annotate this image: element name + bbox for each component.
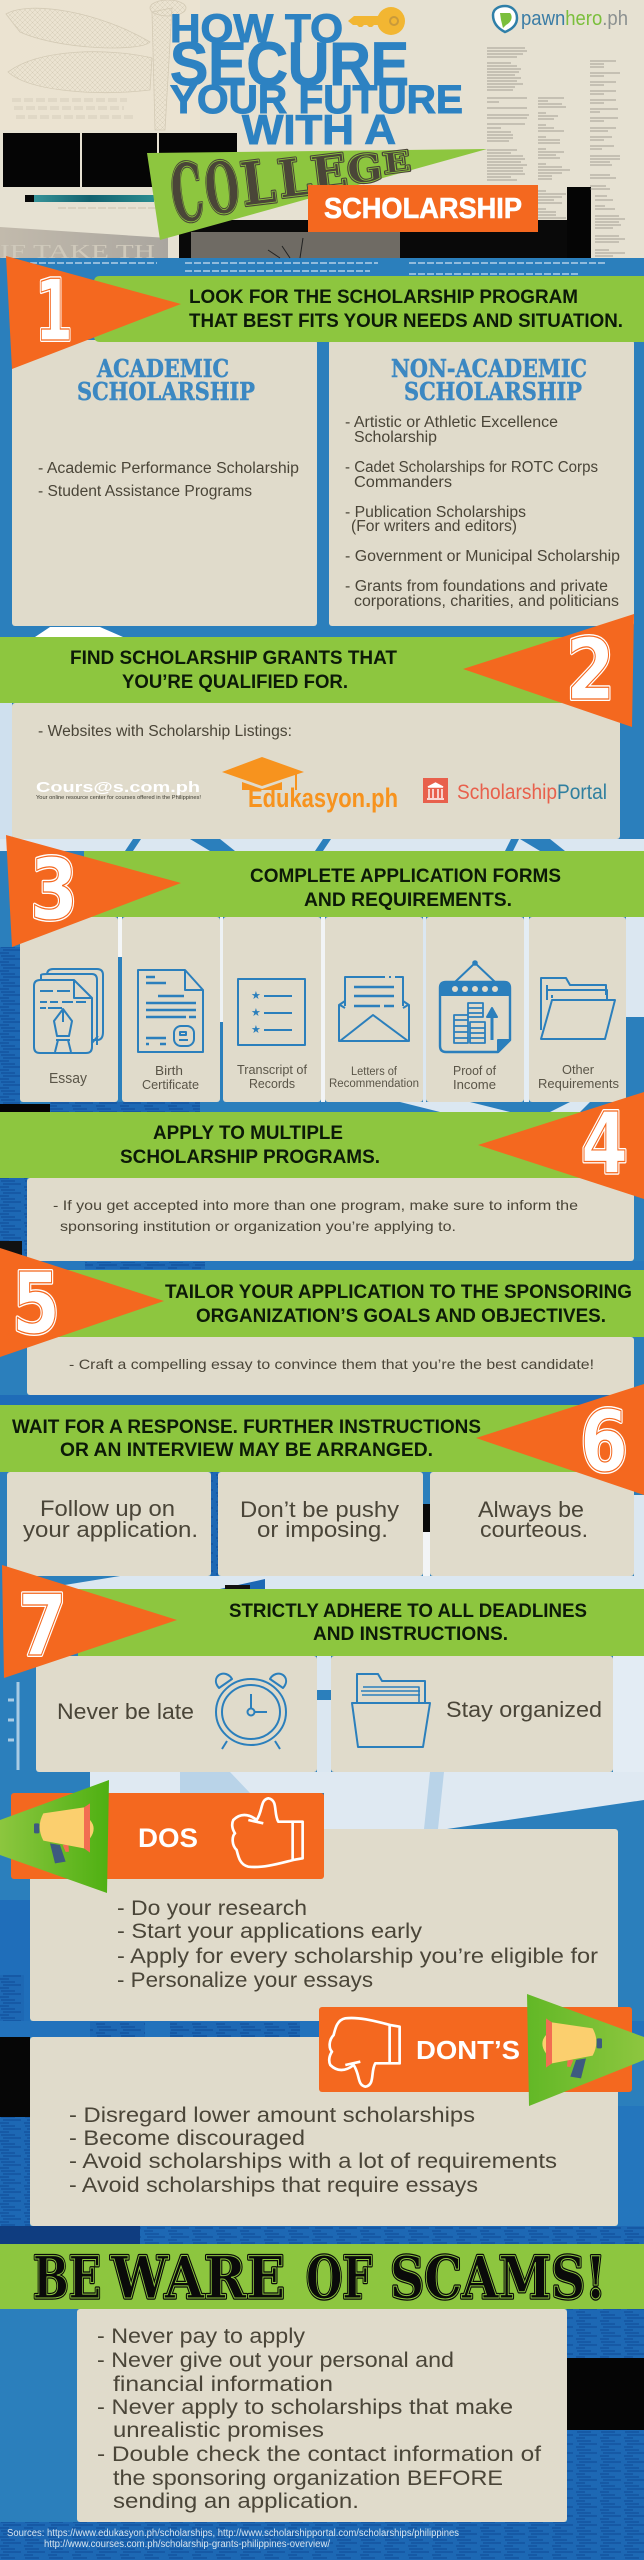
pennant: step 3: [6, 835, 181, 947]
panel: other requirements: [529, 917, 626, 1102]
sources: Sources: https://www.edukasyon.ph/scholarships, http://www.scholarshipportal.com/scholarships/philippines: [7, 2528, 459, 2539]
panel: other requirements: Other: [562, 1063, 594, 1077]
sources: http://www.courses.com.ph/scholarship-grants-philippines-overview/: [44, 2539, 330, 2550]
pennant: college: G: [344, 144, 385, 193]
panel: letters of recommendation: Recommendation: [329, 1078, 419, 1090]
panel: dos list: - Start your applications early: [117, 1920, 423, 1943]
pennant: step 6: [476, 1384, 644, 1495]
pennant: college: C: [166, 144, 209, 242]
panel: non-academic scholarship: - Artistic or Athletic Excellence: [345, 414, 558, 431]
panel: don't be pushy: [218, 1472, 423, 1576]
icon: envelope: [339, 977, 409, 1041]
pennant: college: [147, 144, 487, 242]
panel: don'ts list: - Become discouraged: [69, 2127, 305, 2150]
banner: step 7: STRICTLY ADHERE TO ALL DEADLINES: [229, 1600, 587, 1622]
panel: academic scholarship: [12, 340, 317, 626]
banner: step 5: TAILOR YOUR APPLICATION TO THE SPONSORING: [165, 1281, 632, 1303]
sources: [7, 2528, 459, 2550]
banner: step 2: FIND SCHOLARSHIP GRANTS THAT: [70, 647, 397, 669]
upside-down strip text: [30, 263, 606, 274]
banner: step 3: AND REQUIREMENTS.: [304, 889, 512, 911]
pennant: step 4: [478, 1092, 644, 1199]
pennant: college: G: [344, 144, 385, 193]
pennant: college: E: [308, 144, 350, 203]
pennant: college: E: [308, 144, 350, 203]
panel: courteous: courteous.: [480, 1517, 588, 1542]
icon: certificate: [138, 970, 203, 1052]
icon: thumbs down: [329, 2018, 400, 2087]
icon: transcript: ★: [251, 1023, 261, 1036]
panel: proof of income: Proof of: [453, 1064, 497, 1078]
pennant: step 3: 3: [30, 841, 78, 940]
pennant: college: L: [275, 146, 315, 211]
panel: step 4 text: - If you get accepted into more than one program, make sure to inform the: [53, 1197, 578, 1213]
icon: key: [348, 7, 405, 35]
banner: dos: [0, 1780, 324, 1893]
panel: don'ts list: - Disregard lower amount scholarships: [69, 2104, 475, 2127]
icon: essay: [34, 969, 103, 1053]
panel: non-academic scholarship: corporations, charities, and politicians: [354, 593, 619, 610]
panel: academic scholarship: SCHOLARSHIP: [77, 377, 255, 406]
panel: birth certificate: Certificate: [142, 1078, 199, 1092]
panel: websites: [12, 703, 620, 839]
icon: folder: [541, 978, 615, 1039]
pennant: college: L: [237, 147, 279, 221]
panel: letters of recommendation: [325, 917, 423, 1102]
panel: non-academic scholarship: NON-ACADEMIC: [391, 354, 587, 383]
icon: transcript: [238, 979, 305, 1045]
grey banner: [0, 227, 168, 263]
pennant: step 2: [463, 614, 634, 727]
panel: don't be pushy: or imposing.: [257, 1517, 388, 1542]
panel: scam warnings: the sponsoring organization BEFORE: [113, 2467, 503, 2490]
header collage background: [0, 0, 644, 263]
title: [170, 7, 463, 153]
icon: megaphone: [34, 1803, 94, 1863]
title: WITH A: [242, 106, 396, 153]
panel: stay organized: [331, 1656, 613, 1772]
panel: dos list: - Apply for every scholarship you’re eligible for: [117, 1945, 598, 1968]
panel: dos list: [30, 1829, 618, 2021]
panel: non-academic scholarship: - Grants from foundations and private: [345, 578, 608, 595]
panel: websites: - Websites with Scholarship Listings:: [38, 723, 292, 740]
panel: non-academic scholarship: (For writers and editors): [351, 518, 517, 535]
banner: beware of scams: OF: [306, 2244, 372, 2312]
banner: step 5: ORGANIZATION’S GOALS AND OBJECTIVES.: [196, 1305, 606, 1327]
panel: non-academic scholarship: [329, 340, 634, 626]
black photo blocks: [3, 133, 237, 187]
panel: scam warnings: financial information: [113, 2373, 333, 2396]
panel: step 5 text: [27, 1337, 634, 1395]
panel: step 4 text: sponsoring institution or organization you’re applying to.: [60, 1218, 456, 1234]
panel: courteous: [430, 1472, 634, 1576]
banner: beware of scams: WARE: [110, 2244, 285, 2312]
panel: letters of recommendation: Letters of: [351, 1066, 398, 1078]
logo: pawnhero.ph: pawnhero.ph: [521, 8, 628, 30]
banner: step 5: [40, 1270, 644, 1337]
pennant: college: L: [275, 146, 315, 211]
banner: beware of scams: [0, 2244, 644, 2312]
panel: non-academic scholarship: - Government or Municipal Scholarship: [345, 548, 620, 565]
panel: essay: [20, 917, 118, 1102]
title: YOUR FUTURE: [170, 78, 463, 122]
title: HOW TO: [170, 7, 343, 51]
pennant: step 1: 1: [35, 262, 73, 361]
panel: non-academic scholarship: - Publication Scholarships: [345, 504, 526, 521]
panel: proof of income: Income: [453, 1078, 496, 1092]
banner: step 4: SCHOLARSHIP PROGRAMS.: [120, 1146, 380, 1168]
panel: transcript of records: Records: [249, 1077, 295, 1091]
logo: pawnhero.ph: [493, 6, 628, 32]
grey banner: IF TAKE TH: [0, 241, 155, 263]
pennant: step 7: 7: [18, 1577, 67, 1676]
banner: step 2: YOU’RE QUALIFIED FOR.: [122, 671, 348, 693]
panel: non-academic scholarship: Scholarship: [354, 429, 437, 446]
banner: scholarship: [308, 185, 538, 232]
panel: dos list: - Do your research: [117, 1897, 307, 1920]
pennant: step 5: 5: [12, 1255, 60, 1354]
panel: never be late: [36, 1656, 317, 1772]
banner: step 6: [0, 1405, 600, 1472]
title: SECURE: [170, 30, 409, 98]
banner: step 4: APPLY TO MULTIPLE: [153, 1122, 343, 1144]
banner: step 6: OR AN INTERVIEW MAY BE ARRANGED.: [60, 1439, 433, 1461]
panel: scam warnings: [77, 2309, 567, 2522]
banner: beware of scams: WARE: [110, 2244, 285, 2312]
panel: don'ts list: - Avoid scholarships that require essays: [69, 2174, 478, 2197]
banner: step 6: WAIT FOR A RESPONSE. FURTHER INSTRUCTIONS: [12, 1416, 481, 1438]
pennant: college: E: [381, 145, 412, 181]
banner: step 1: [94, 276, 644, 342]
pennant: step 5: 5: [12, 1255, 60, 1354]
icon: megaphone: [542, 2018, 602, 2078]
pennant: step 7: 7: [18, 1577, 67, 1676]
panel: non-academic scholarship: Commanders: [354, 474, 452, 491]
panel: step 4 text: [27, 1178, 634, 1261]
panel: scam warnings: sending an application.: [113, 2490, 359, 2513]
icon: income calendar: [440, 961, 510, 1052]
banner: step 1: LOOK FOR THE SCHOLARSHIP PROGRAM: [189, 286, 578, 308]
logo: courses.com.ph: [36, 779, 201, 801]
banner: don'ts: [319, 1994, 644, 2106]
panel: don'ts list: [30, 2037, 618, 2226]
panel: transcript of records: Transcript of: [237, 1063, 308, 1077]
panel: follow up: Follow up on: [40, 1496, 175, 1521]
panel: scam warnings: unrealistic promises: [113, 2419, 324, 2442]
panel: academic scholarship: ACADEMIC: [96, 354, 229, 383]
panel: stay organized: Stay organized: [446, 1697, 602, 1722]
icon: thumbs up: [232, 1798, 303, 1867]
icon: transcript: ★: [251, 989, 261, 1002]
banner: step 7: AND INSTRUCTIONS.: [313, 1623, 508, 1645]
pennant: step 5: [0, 1248, 164, 1357]
panel: step 5 text: - Craft a compelling essay to convince them that you’re the best candidate!: [69, 1356, 594, 1372]
panel: proof of income: [426, 917, 524, 1102]
panel: don'ts list: - Avoid scholarships with a lot of requirements: [69, 2150, 557, 2173]
panel: don't be pushy: Don’t be pushy: [240, 1497, 399, 1522]
panel: dos list: - Personalize your essays: [117, 1969, 373, 1992]
pennant: step 6: 6: [580, 1393, 628, 1492]
panel: follow up: [7, 1472, 211, 1576]
panel: scam warnings: - Never give out your personal and: [97, 2349, 454, 2372]
banner: step 4: [0, 1112, 600, 1178]
banner: step 3: [84, 851, 644, 917]
pennant: step 4: 4: [581, 1095, 628, 1194]
pennant: college: O: [200, 144, 244, 232]
banner: step 1: THAT BEST FITS YOUR NEEDS AND SITUATION.: [189, 310, 623, 332]
panel: academic scholarship: - Student Assistance Programs: [38, 483, 252, 500]
panel: scam warnings: - Double check the contact information of: [97, 2443, 541, 2466]
banner: dos: DOS: [138, 1823, 198, 1853]
panel: non-academic scholarship: SCHOLARSHIP: [404, 377, 582, 406]
pennant: step 1: 1: [35, 262, 73, 361]
pennant: step 2: 2: [566, 621, 615, 720]
panel: other requirements: Requirements: [538, 1077, 619, 1091]
panel: never be late: Never be late: [57, 1699, 194, 1724]
pennant: college: O: [200, 144, 244, 232]
pennant: step 1: [6, 256, 181, 369]
panel: birth certificate: [122, 917, 220, 1102]
banner: beware of scams: BE: [33, 2244, 101, 2312]
panel: courteous: Always be: [478, 1497, 584, 1522]
dark photo: [179, 187, 591, 258]
small text columns: [487, 48, 625, 256]
logo: edukasyon.ph: Edukasyon.ph: [248, 783, 398, 813]
panel: non-academic scholarship: - Cadet Scholarships for ROTC Corps: [345, 459, 598, 476]
banner: beware of scams: OF: [306, 2244, 372, 2312]
pennant: step 6: 6: [580, 1393, 628, 1492]
panel: scam warnings: - Never apply to scholarships that make: [97, 2396, 513, 2419]
logo: scholarshipportal: ScholarshipPortal: [457, 781, 607, 804]
pennant: step 2: 2: [566, 621, 615, 720]
panel: follow up: your application.: [23, 1517, 198, 1542]
pennant: college: E: [381, 145, 412, 181]
banner: step 2: [0, 637, 610, 703]
panel: academic scholarship: - Academic Performance Scholarship: [38, 460, 299, 477]
teal strip: [25, 195, 154, 202]
icon: folder: [352, 1674, 430, 1747]
logo: courses.com.ph: Your online resource center for courses offered in the Philippines!: [36, 795, 201, 801]
logo: edukasyon.ph: [222, 757, 398, 813]
icon: transcript: ★: [251, 1006, 261, 1019]
pennant: college: C: [166, 144, 209, 242]
pennant: step 7: [2, 1565, 177, 1678]
panel: transcript of records: [223, 917, 321, 1102]
banner: beware of scams: BE: [33, 2244, 101, 2312]
pennant: step 4: 4: [581, 1095, 628, 1194]
pennant: step 3: 3: [30, 841, 78, 940]
banner: don'ts: DONT’S: [416, 2035, 520, 2065]
icon: alarm clock: [216, 1674, 286, 1749]
banner: step 3: COMPLETE APPLICATION FORMS: [250, 865, 561, 887]
dragonfly sketch: [6, 0, 186, 130]
banner: step 7: [78, 1589, 644, 1656]
panel: birth certificate: Birth: [155, 1064, 183, 1078]
pennant: college: L: [237, 147, 279, 221]
panel: essay: Essay: [49, 1070, 87, 1087]
panel: scam warnings: - Never pay to apply: [97, 2325, 306, 2348]
banner: scholarship: SCHOLARSHIP: [324, 193, 522, 225]
logo: courses.com.ph: Cours@s.com.ph: [36, 779, 200, 796]
